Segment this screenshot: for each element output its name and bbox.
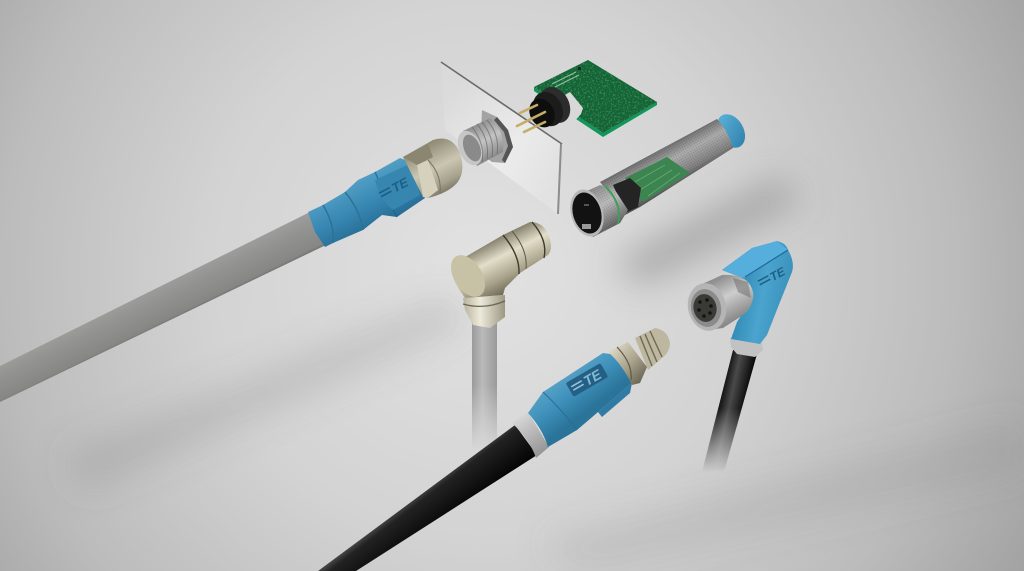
- logo: TE: TE: [389, 174, 411, 195]
- collar: grey: [730, 338, 763, 357]
- right-angle brass connector with grey cable: [444, 222, 551, 450]
- metal coupling: [700, 275, 753, 330]
- socket bracket: [563, 92, 583, 124]
- internal contacts: [613, 178, 641, 213]
- sensor: [565, 109, 751, 240]
- blue end cap: [711, 109, 751, 153]
- lower nut: [463, 295, 505, 328]
- circuit board with connector: [517, 58, 660, 138]
- coupling nut: brass: [403, 139, 462, 198]
- connector body: black: [524, 82, 576, 132]
- soft shadows: [65, 178, 1024, 571]
- logo: TE: TE: [581, 366, 605, 389]
- right-angle blue connector with black cable: [683, 241, 793, 472]
- threaded brass end: [608, 328, 670, 385]
- barrel: [453, 222, 551, 298]
- cable: grey fading: [472, 322, 497, 450]
- black cable with straight blue connector: [318, 328, 670, 571]
- overmold: blue: [308, 158, 425, 247]
- cable: black fading: [702, 350, 757, 472]
- end face: [444, 249, 492, 303]
- cable: black: [318, 425, 537, 571]
- threaded barrel: [463, 118, 503, 166]
- bulkhead fitting: [453, 110, 513, 169]
- flange: [480, 110, 513, 163]
- metal front: [565, 185, 628, 240]
- threaded tube: [600, 119, 733, 215]
- cable: grey: [0, 212, 328, 402]
- internal board: [625, 157, 690, 202]
- grey cable with blue connector: [0, 139, 462, 402]
- collar: grey: [512, 412, 549, 458]
- logo: TE: TE: [767, 264, 788, 284]
- housing: blue: [722, 241, 793, 344]
- contact face: [691, 292, 719, 324]
- PCB: [530, 58, 660, 138]
- glass panel: [441, 62, 562, 214]
- body: blue: [528, 353, 632, 447]
- pins: gold: [517, 105, 545, 132]
